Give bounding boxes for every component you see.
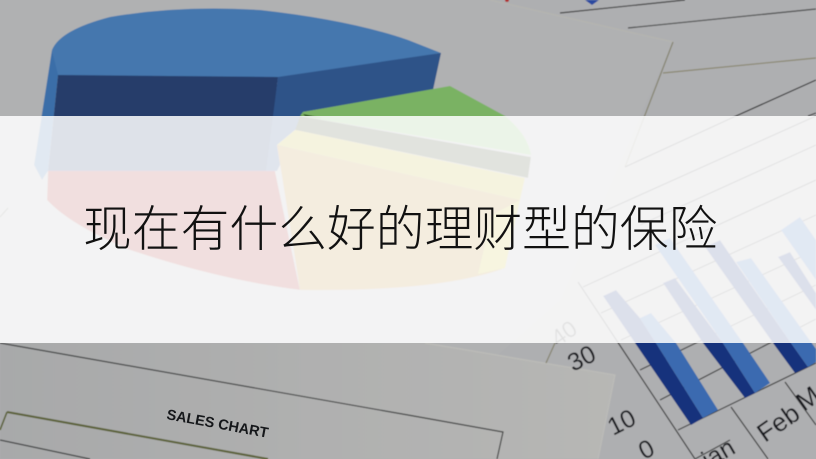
pie: green side [295,116,531,178]
chart axis numbers and month labels: Feb [751,398,805,448]
translucent white title band [0,116,816,343]
pie: green top [300,86,531,155]
grid lines [578,180,816,459]
chart axis numbers and month labels: 10 [603,404,641,441]
bars: April [778,252,816,310]
chart axis numbers and month labels: 30 [563,340,601,377]
bars: March [705,240,808,373]
chart axis numbers and month labels: 40 [546,315,582,351]
pie: dark front face [48,75,278,171]
pie: right dark face [266,53,441,171]
pie: yellow side [478,200,520,274]
chart axis numbers and month labels [546,315,816,459]
pie: pink slice [47,171,300,290]
lower left paper [0,343,615,459]
bars: January [603,290,703,425]
bars: February [663,278,755,398]
pie: yellow slice [277,130,525,200]
3D pie chart [34,9,531,290]
pie: blue top [52,9,441,80]
chart label: SALES CHART: SALES CHART [165,407,270,442]
top right paper lines [0,0,816,225]
pie: left side [34,50,58,180]
bar chart: paper with gridlines and bars [578,180,816,459]
title: 现在有什么好的理财型的保险 [83,203,717,257]
icon: top edge markers [585,0,599,5]
